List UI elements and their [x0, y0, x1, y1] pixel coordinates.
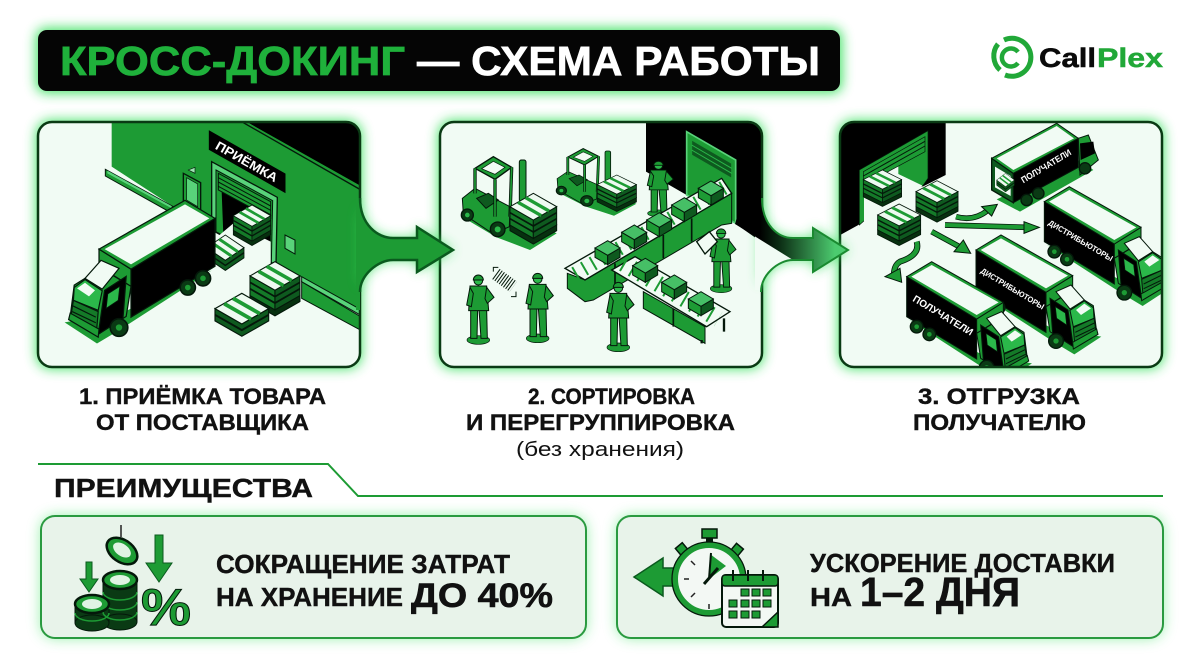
title banner: КРОСС-ДОКИНГ [60, 38, 405, 84]
card: storage cost savings: ДО 40% [411, 577, 553, 615]
caption: step 2: (без хранения) [516, 439, 684, 461]
workers [467, 229, 736, 352]
panel: step 3 shipping [838, 120, 1170, 381]
card: faster delivery [617, 516, 1163, 638]
panel: step 2 sorting [438, 120, 764, 369]
logo: CallPlex: Plex [1097, 43, 1163, 73]
worker at dock [647, 161, 673, 217]
caption: step 1: ОТ ПОСТАВЩИКА [96, 410, 309, 435]
pallet stacks [863, 170, 958, 246]
caption: step 1 [79, 384, 326, 435]
icon: stopwatch, arrow and calendar [634, 529, 778, 627]
truck [65, 200, 215, 344]
caption: step 1: 1. ПРИЁМКА ТОВАРА [79, 384, 326, 409]
logo: CallPlex [994, 38, 1163, 76]
sign: ПРИЁМКА [208, 129, 286, 194]
logo: CallPlex: Call [1039, 43, 1096, 73]
arrows to trucks [885, 204, 1039, 282]
truck: distributors right [1044, 187, 1170, 306]
title banner [36, 28, 842, 93]
pallet stacks [215, 262, 300, 336]
caption: step 3 [913, 384, 1086, 435]
arrow: step 1 to step 2 [356, 198, 453, 310]
arrow: step 2 to step 3 [735, 190, 848, 292]
truck: distributors middle [976, 235, 1101, 354]
icon: coins and percent: % [141, 579, 191, 637]
card: storage cost savings [41, 516, 586, 638]
truck: distributors middle: ДИСТРИБЬЮТОРЫ [979, 266, 1046, 312]
truck: recipients front: ПОЛУЧАТЕЛИ [910, 294, 975, 338]
sign: ПРИЁМКА: ПРИЁМКА [213, 138, 281, 185]
panel: step 1 receiving [36, 120, 363, 369]
card: faster delivery: 1–2 ДНЯ [860, 569, 1020, 615]
caption: step 2: 2. СОРТИРОВКА [528, 384, 695, 409]
truck: top recipients: ПОЛУЧАТЕЛИ [1019, 147, 1073, 185]
caption: step 2 [466, 384, 735, 461]
card: faster delivery: НА [810, 582, 852, 612]
icon: wall panel [285, 235, 295, 254]
forklifts [461, 149, 636, 250]
conveyor [565, 178, 732, 343]
heading: advantages: ПРЕИМУЩЕСТВА [54, 473, 313, 503]
card: faster delivery: УСКОРЕНИЕ ДОСТАВКИ [810, 548, 1115, 578]
truck: top recipients [992, 123, 1098, 212]
icon: door [183, 167, 201, 210]
caption: step 2: И ПЕРЕГРУППИРОВКА [466, 410, 735, 435]
caption: step 3: 3. ОТГРУЗКА [918, 384, 1080, 409]
heading: advantages [38, 464, 1163, 503]
icon: clipboard [697, 232, 717, 254]
truck: recipients front [906, 261, 1032, 366]
card: storage cost savings: СОКРАЩЕНИЕ ЗАТРАТ [216, 549, 510, 579]
card: storage cost savings: НА ХРАНЕНИЕ [216, 582, 403, 612]
icon: coins and percent [75, 525, 191, 637]
title banner: — СХЕМА РАБОТЫ [417, 38, 820, 84]
caption: step 3: ПОЛУЧАТЕЛЮ [913, 410, 1086, 435]
icon: barcode scan [493, 267, 516, 297]
truck: distributors right: ДИСТРИБЬЮТОРЫ [1047, 218, 1115, 263]
